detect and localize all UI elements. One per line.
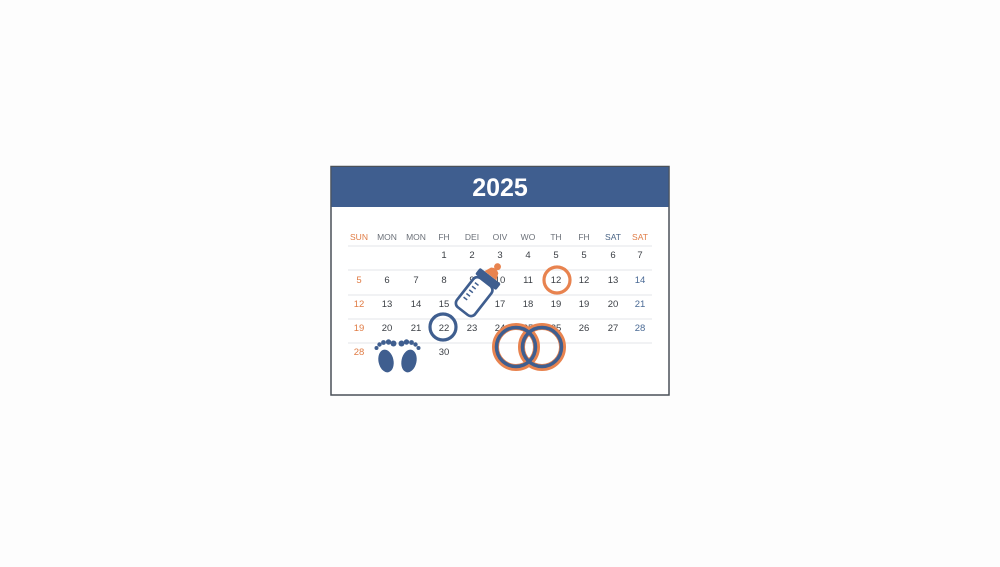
date grid: 25 — [523, 323, 533, 334]
date grid: 17 — [495, 299, 505, 310]
calendar card — [331, 166, 669, 395]
date grid: 25 — [551, 323, 561, 334]
date grid: 6 — [610, 250, 616, 261]
icon: wedding rings — [496, 326, 562, 368]
weekday header row: SUN — [350, 232, 368, 242]
date grid: 27 — [608, 323, 618, 334]
weekday header row: TH — [550, 232, 562, 242]
date grid: 7 — [637, 250, 643, 261]
date grid: 12 — [551, 275, 561, 286]
date grid: 18 — [523, 299, 533, 310]
date grid: 26 — [579, 323, 589, 334]
weekday header row: DEI — [465, 232, 479, 242]
weekday header row — [350, 232, 648, 242]
weekday header row: MON — [406, 232, 426, 242]
highlight circle: 22 — [430, 314, 456, 340]
date grid: 28 — [354, 347, 364, 358]
date grid: 9 — [469, 275, 475, 286]
date grid: 22 — [439, 323, 449, 334]
date grid: 19 — [579, 299, 589, 310]
date grid: 19 — [551, 299, 561, 310]
date grid: 2 — [469, 250, 475, 261]
date grid: 15 — [439, 299, 449, 310]
date grid: 19 — [354, 323, 364, 334]
date grid: 28 — [635, 323, 645, 334]
date grid: 14 — [635, 275, 645, 286]
date grid: 11 — [523, 275, 533, 286]
date grid: 13 — [608, 275, 618, 286]
weekday header row: WO — [521, 232, 536, 242]
date grid: 10 — [495, 275, 505, 286]
date grid: 5 — [581, 250, 587, 261]
date grid: 20 — [608, 299, 618, 310]
date grid: 8 — [441, 275, 447, 286]
date grid — [354, 250, 645, 358]
weekday header row: FH — [438, 232, 450, 242]
date grid: 1 — [441, 250, 447, 261]
date grid: 5 — [356, 275, 362, 286]
highlight circle: 12 — [544, 267, 570, 293]
date grid: 14 — [411, 299, 421, 310]
date grid: 23 — [467, 323, 477, 334]
date grid: 5 — [553, 250, 559, 261]
date grid: 6 — [384, 275, 390, 286]
title: 2025: 2025 — [472, 174, 528, 202]
date grid: 13 — [382, 299, 392, 310]
date grid: 12 — [354, 299, 364, 310]
date grid: 7 — [413, 275, 419, 286]
date grid: 30 — [439, 347, 449, 358]
weekday header row: FH — [578, 232, 590, 242]
date grid: 4 — [525, 250, 531, 261]
icon: baby bottle — [452, 256, 510, 319]
weekday header row: SAT — [605, 232, 621, 242]
weekday header row: OIV — [493, 232, 508, 242]
date grid: 3 — [497, 250, 503, 261]
weekday header row: SAT — [632, 232, 648, 242]
date grid: 20 — [382, 323, 392, 334]
icon: baby feet — [374, 339, 420, 374]
date grid: 24 — [495, 323, 505, 334]
header bar — [332, 167, 668, 207]
date grid: 12 — [579, 275, 589, 286]
date grid: 21 — [635, 299, 645, 310]
weekday header row: MON — [377, 232, 397, 242]
date grid: 21 — [411, 323, 421, 334]
